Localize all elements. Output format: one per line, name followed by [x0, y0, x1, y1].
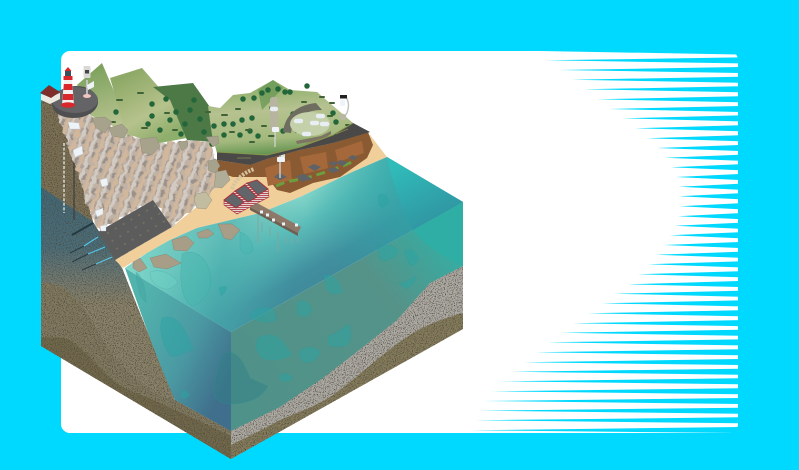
pier sensors	[260, 212, 298, 225]
road	[217, 123, 370, 165]
water body	[125, 157, 463, 431]
drain pipes	[72, 223, 93, 235]
monitoring ring and structures	[270, 95, 348, 147]
eroded bluff	[217, 132, 373, 193]
block diagram illustration	[40, 63, 463, 459]
roof 1	[224, 193, 244, 208]
lighthouse	[61, 67, 75, 108]
roof 3	[247, 180, 268, 195]
gray borehole	[73, 163, 75, 220]
cliff sensors	[68, 122, 108, 231]
red boathouses	[224, 180, 269, 214]
roof 2	[235, 185, 257, 202]
gauge mast	[344, 97, 348, 117]
seabed gravel layer	[231, 261, 463, 459]
sensor post on bluff	[279, 155, 281, 178]
beach	[115, 135, 387, 268]
sign post	[274, 132, 276, 147]
groundwater layer	[41, 187, 145, 330]
water front right face	[231, 202, 463, 431]
beach rocks	[133, 224, 240, 272]
seabed brown layer	[231, 313, 463, 459]
tower	[270, 97, 278, 131]
hill: centre peak	[110, 68, 187, 143]
right cross-section face	[231, 261, 463, 459]
gray revetment slab	[98, 200, 172, 260]
lower sediment layer	[41, 337, 231, 459]
water front left face	[125, 268, 231, 431]
upper soil layer	[41, 96, 93, 222]
rock ring	[283, 103, 322, 133]
left cross-section face	[41, 96, 231, 459]
sensors	[272, 109, 327, 134]
hill: left peak	[77, 63, 125, 132]
hill: right massif	[208, 80, 353, 156]
white card	[61, 51, 738, 433]
water surface	[125, 157, 463, 332]
pier	[250, 203, 301, 252]
back water wedge	[387, 157, 463, 230]
boreholes and drains	[64, 143, 112, 270]
keeper's house	[40, 85, 60, 104]
shrubs	[110, 93, 349, 142]
camera mast	[83, 66, 94, 98]
mid sediment layer	[41, 282, 231, 459]
stairs to beach	[232, 169, 254, 189]
headland platform	[52, 86, 98, 118]
hills	[77, 63, 353, 156]
boathouse walls	[224, 183, 269, 214]
cliff boulders	[92, 117, 230, 209]
cliff rock face	[57, 113, 227, 230]
striped spike pattern on right edge	[471, 51, 745, 433]
trees	[116, 86, 336, 144]
submerged rocks	[136, 194, 419, 404]
pier piles	[258, 215, 298, 252]
dashed borehole	[63, 143, 65, 213]
hill: dark forest slope	[153, 83, 218, 142]
